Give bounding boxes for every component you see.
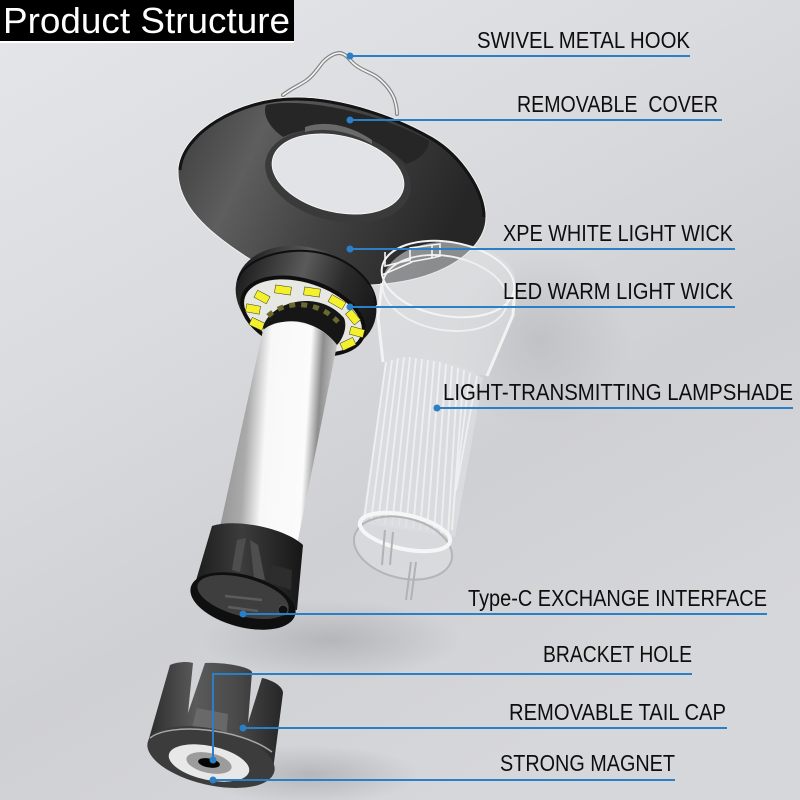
title: Product Structure <box>3 0 290 41</box>
callout: XPE white light wick <box>346 220 735 252</box>
callout: Type-C exchange interface <box>240 585 767 618</box>
lantern: inner collar <box>263 301 345 345</box>
callout: removable cover <box>346 91 722 124</box>
callout: strong magnet: STRONG MAGNET <box>500 750 675 776</box>
callout: XPE white light wick: XPE WHITE LIGHT WICK <box>503 220 733 246</box>
bracket hole <box>197 757 221 769</box>
soft background shadows <box>200 250 630 800</box>
funnel <box>378 242 515 376</box>
inner shelf <box>305 124 372 144</box>
lantern: removable cover <box>178 97 486 290</box>
base <box>347 507 459 589</box>
lantern: metal tube <box>220 322 337 545</box>
callout: removable tail cap <box>240 699 727 732</box>
callout: removable cover: REMOVABLE COVER <box>517 91 718 117</box>
callout: LED warm light wick: LED WARM LIGHT WICK <box>503 278 733 304</box>
white LED ring <box>235 266 371 366</box>
callout: LED warm light wick <box>346 278 735 310</box>
callout: swivel metal hook <box>346 27 690 60</box>
callout: removable tail cap: REMOVABLE TAIL CAP <box>509 699 726 725</box>
lantern: bottom cap with Type-C port <box>184 523 303 640</box>
icon: LED chips <box>245 285 365 351</box>
cover opening <box>256 116 420 236</box>
callout: strong magnet <box>210 750 675 784</box>
dark inner recess <box>265 103 429 164</box>
lantern: tail cap <box>141 662 283 799</box>
lampshade <box>347 231 520 600</box>
ribbed body <box>362 358 483 537</box>
callout: bracket hole <box>210 641 692 764</box>
callout: bracket hole: BRACKET HOLE <box>543 641 692 667</box>
lantern: light ring housing <box>221 228 391 372</box>
callout: swivel metal hook: SWIVEL METAL HOOK <box>477 27 690 53</box>
icon: swivel metal hook <box>283 53 397 114</box>
magnet ring <box>165 738 253 788</box>
